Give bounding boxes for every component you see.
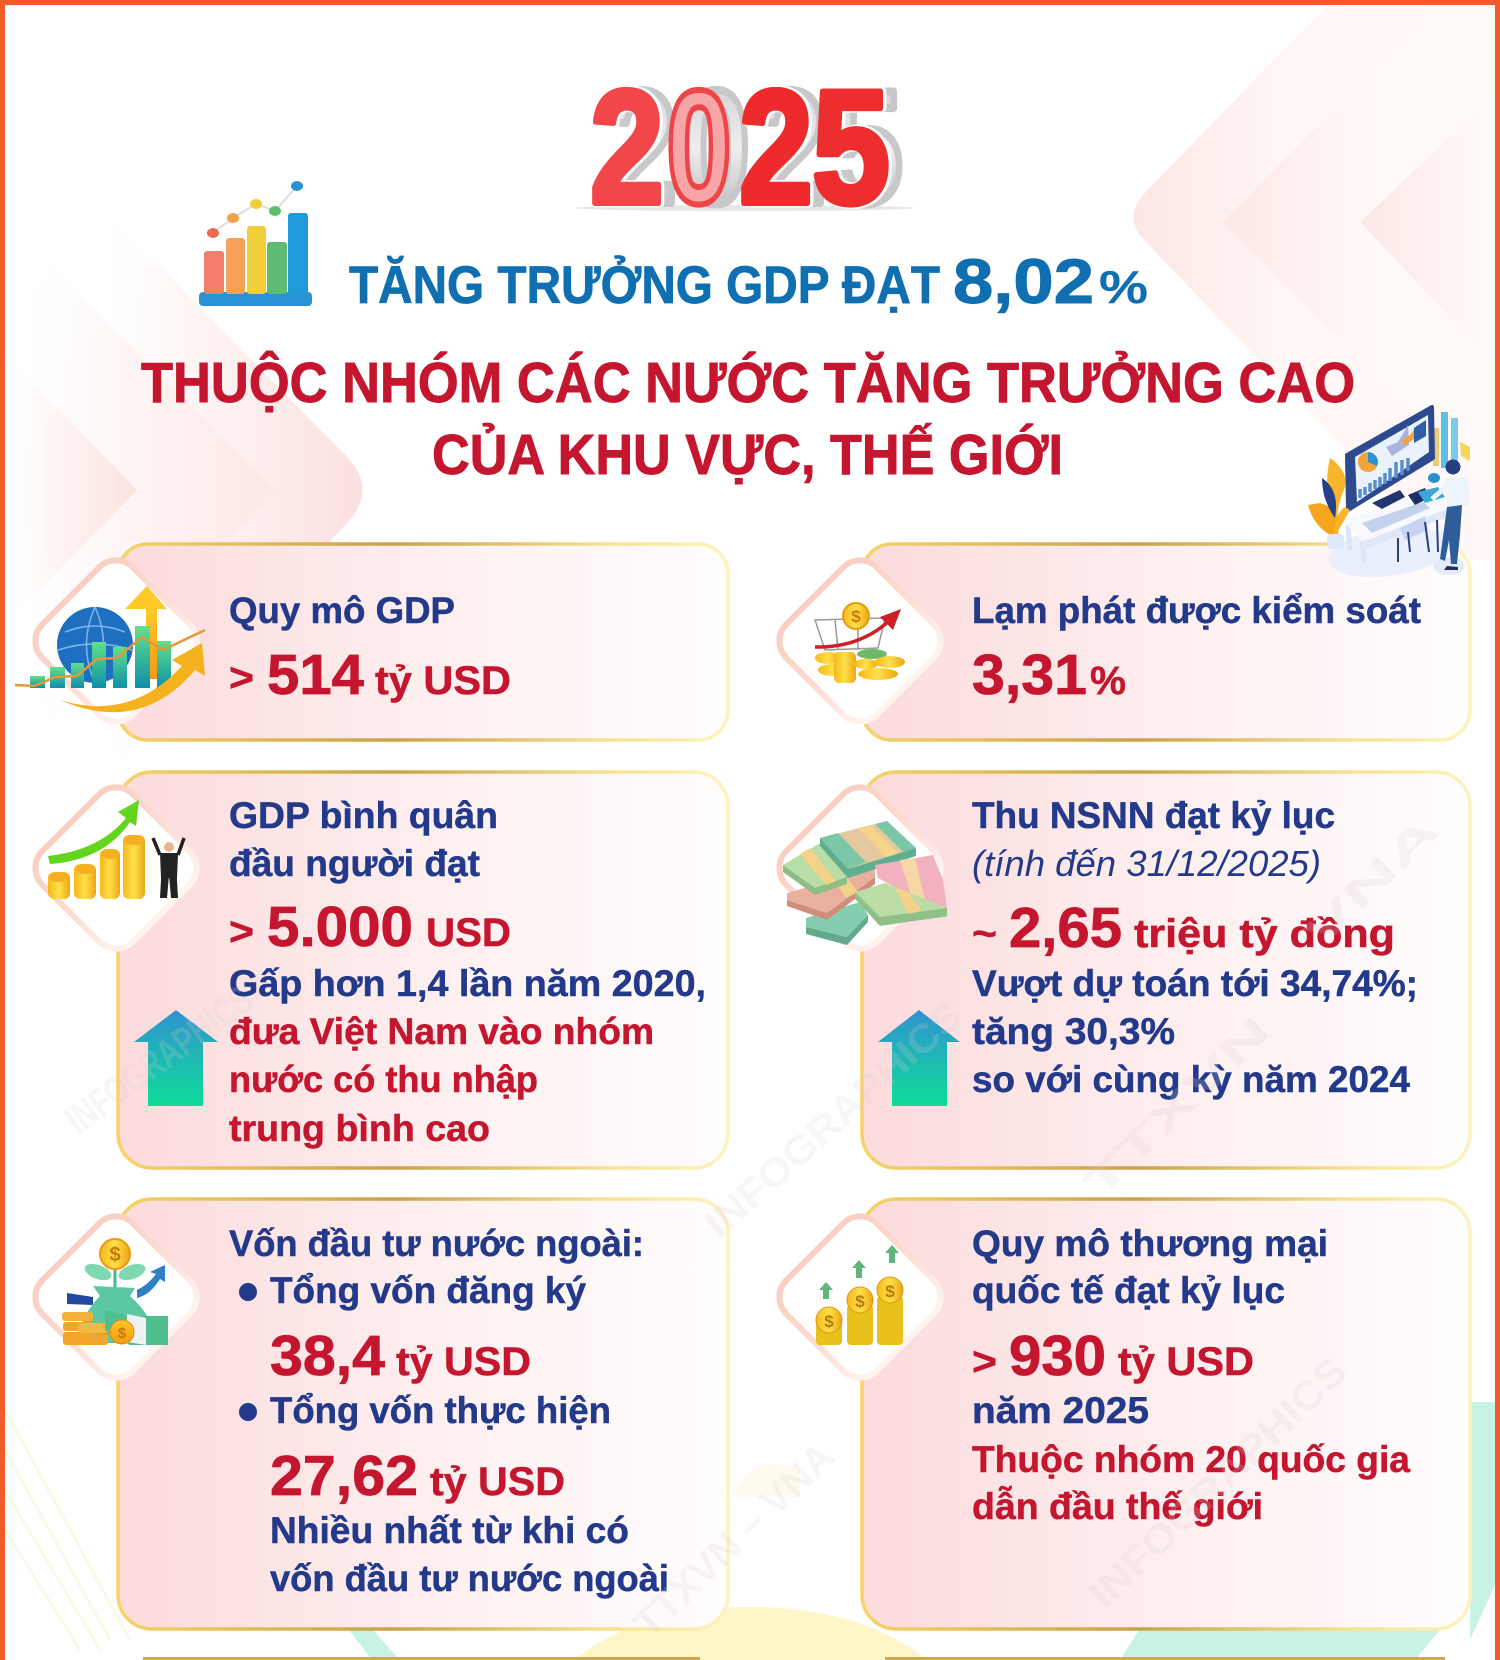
year 2025 3D title: 2 [590,57,664,238]
text: international trade: tỷ USD [1118,1340,1254,1384]
icon: coin stacks with arrows: $ [855,1292,865,1311]
text: state budget revenue: ~ [972,912,997,956]
text: international trade: dẫn đầu thế giới [972,1486,1263,1527]
text: foreign investment: Vốn đầu tư nước ngoài: [229,1223,644,1264]
watermark: TTXVN [1076,1008,1279,1206]
text: GDP per capita: đầu người đạt [229,843,480,884]
icon: money bag plant: $ [109,1244,121,1266]
text: GDP size [229,590,511,707]
text: state budget revenue: Thu NSNN đạt kỷ lục [972,795,1335,836]
year 2025 3D title: 2 [592,57,666,238]
watermark: INFOGRAPHICS [1081,1349,1356,1616]
text: GDP per capita: GDP bình quân [229,795,498,836]
icon: coin stacks with arrows: $ [824,1312,834,1331]
year 2025 3D title: 0 [682,57,750,238]
year 2025 3D title: 2 [603,57,677,238]
text: GDP per capita: USD [426,911,511,955]
panel: GDP per capita [25,772,728,1168]
text: GDP size: tỷ USD [375,659,511,703]
icon: GDP diamond badge [15,550,207,732]
bullet [239,1283,257,1301]
text: international trade: quốc tế đạt kỷ lục [972,1270,1285,1311]
panel: inflation [769,544,1470,740]
year 2025 3D title: 2 [739,57,813,238]
panel: state budget revenue [769,772,1470,1168]
text: international trade: Thuộc nhóm 20 quốc gia [972,1439,1410,1480]
text: international trade: > [972,1340,997,1384]
icon: coin stacks with arrows [769,1206,951,1388]
text: inflation: Lạm phát được kiểm soát [972,590,1421,631]
year 2025 3D title: 5 [827,57,903,238]
text: state budget revenue: triệu tỷ đồng [1134,912,1395,956]
icon: money bag plant: $ [118,1325,127,1342]
icon: coins and businessman [25,777,207,959]
text: foreign investment: 38,4 [270,1324,385,1388]
text: foreign investment: tỷ USD [396,1340,531,1384]
year 2025 3D title: 2 [741,57,815,238]
year 2025 3D title [575,57,915,238]
icon: analyst at computer [1308,407,1470,584]
text: state budget revenue: tăng 30,3% [972,1011,1175,1052]
bullet [239,1403,257,1421]
text: international trade [972,1223,1410,1527]
watermark: INFOGRAPHICS [57,977,261,1142]
icon: up arrow [878,1010,960,1106]
text: GDP per capita: trung bình cao [229,1108,490,1149]
text: inflation [972,590,1421,707]
text: foreign investment: Tổng vốn thực hiện [270,1390,611,1431]
text: foreign investment: Tổng vốn đăng ký [270,1270,586,1311]
text: state budget revenue: (tính đến 31/12/2025) [972,843,1321,884]
text: GDP per capita: 5.000 [267,895,413,959]
text: GDP size: 514 [267,643,364,707]
text: GDP per capita: Gấp hơn 1,4 lần năm 2020, [229,963,706,1004]
watermark: VNA [1296,807,1449,956]
icon: coins and red arrow: $ [851,607,861,626]
text: international trade: Quy mô thương mại [972,1223,1328,1264]
text: foreign investment: Nhiều nhất từ khi có [270,1510,629,1551]
year 2025 3D title: 5 [814,57,892,238]
panel: international trade [769,1199,1470,1629]
text: inflation: 3,31 [972,643,1087,707]
text: foreign investment: 27,62 [270,1444,418,1508]
heading: GDP growth [349,247,1148,317]
heading: GDP growth: % [1099,261,1148,313]
text: GDP per capita: đưa Việt Nam vào nhóm [229,1011,654,1052]
year 2025 3D title: 2 [752,57,826,238]
heading: high growth group: THUỘC NHÓM CÁC NƯỚC TĂNG TRƯỞNG CAO [141,350,1355,415]
watermark: TTXVN – VNA [626,1434,843,1646]
text: GDP per capita: > [229,910,254,954]
text: GDP size: Quy mô GDP [229,590,455,631]
heading: GDP growth: TĂNG TRƯỞNG GDP ĐẠT [349,255,940,315]
panel: foreign investment [25,1199,728,1629]
panel: GDP size [15,544,728,740]
text: foreign investment: vốn đầu tư nước ngoài [270,1558,669,1599]
text: GDP size: > [229,656,254,700]
icon: coin stacks with arrows: $ [885,1282,895,1301]
text: state budget revenue [972,795,1418,1100]
text: international trade: 930 [1009,1324,1106,1388]
year 2025 3D title: 0 [666,57,732,238]
icon: bar chart [199,181,312,306]
heading: high growth group [141,350,1355,487]
watermark: INFOGRAPHICS [697,993,971,1247]
text: foreign investment: tỷ USD [430,1460,565,1504]
icon: up arrow [134,1010,218,1106]
text: state budget revenue: 2,65 [1009,896,1122,960]
year 2025 3D title: 5 [812,57,890,238]
watermark [57,807,1449,1646]
icon: coins and red arrow [769,550,951,732]
text: state budget revenue: so với cùng kỳ năm 2024 [972,1059,1410,1100]
text: state budget revenue: Vượt dự toán tới 34,74%; [972,963,1418,1004]
heading: GDP growth: 8,02 [953,247,1094,317]
text: GDP per capita: nước có thu nhập [229,1059,538,1100]
text: inflation: % [1090,659,1126,703]
text: international trade: năm 2025 [972,1390,1149,1431]
icon: banknote stacks [769,777,951,959]
text: GDP per capita [229,795,706,1149]
icon: money bag plant [25,1206,207,1388]
heading: high growth group: CỦA KHU VỰC, THẾ GIỚI [432,422,1063,487]
text: foreign investment [229,1223,669,1599]
